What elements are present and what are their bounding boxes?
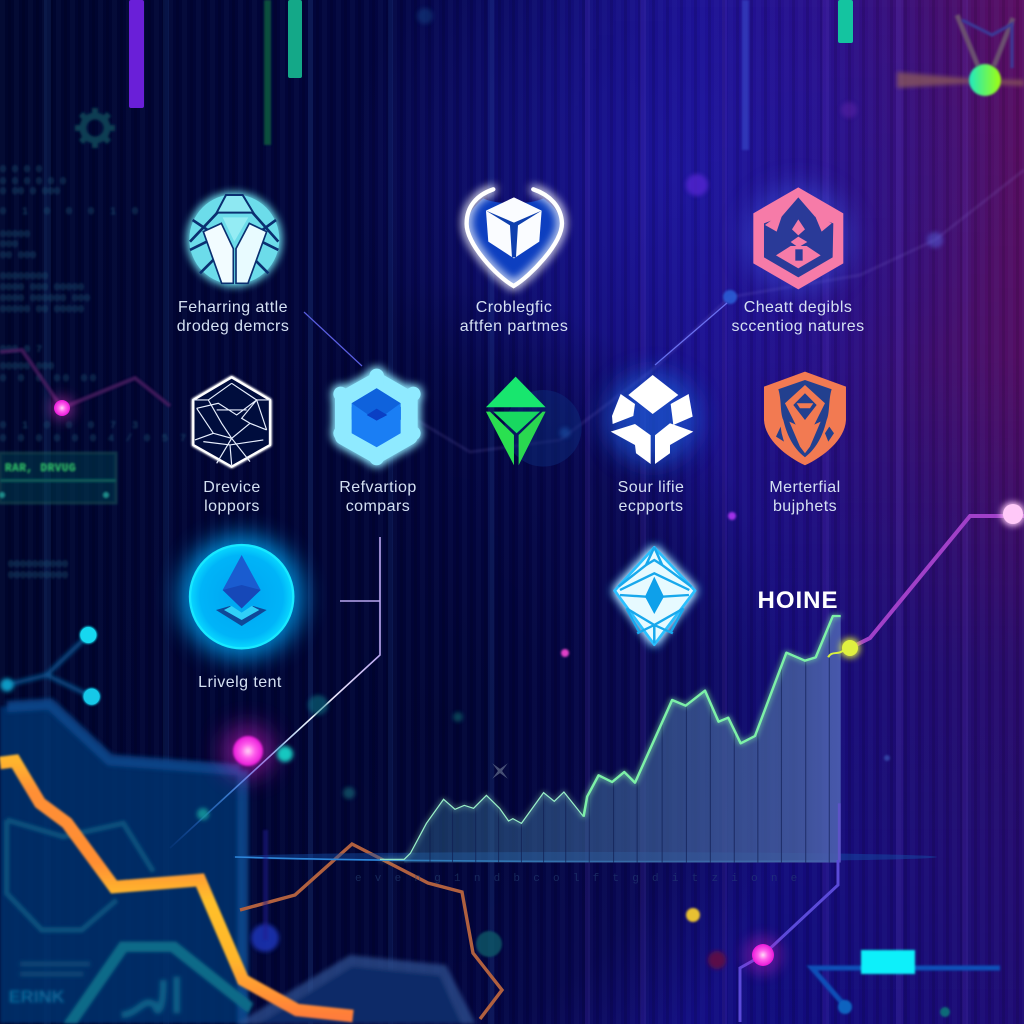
- label: Refvartiop: compars: [346, 498, 410, 515]
- icon 2: shield with cube: [467, 189, 562, 286]
- top-right node network: [897, 15, 1024, 96]
- area chart with glowing line: [380, 616, 844, 863]
- label: Drevice: Drevice: [203, 479, 261, 496]
- icon 1: gem in teal circle: [189, 194, 279, 284]
- label: Cheatt degibls: Cheatt degibls: [744, 299, 852, 316]
- yellow chart marker: [842, 640, 858, 656]
- pink endpoint marker: [1003, 504, 1023, 524]
- faint background trend line: [380, 170, 1024, 452]
- brown trend line: [240, 844, 502, 1019]
- left data text, blurred: 00000: [0, 230, 30, 241]
- label: Merterfial: Merterfial: [769, 479, 841, 496]
- HOINE heading: HOINE: [757, 587, 839, 614]
- icon 9: glowing cyan circle: [180, 535, 303, 658]
- bottom-left glow dots: [197, 695, 328, 952]
- four-point star spark: [484, 755, 516, 787]
- icon 3: pink hexagon: [743, 183, 853, 293]
- label: Feharring attle: drodeg demcrs: [177, 318, 289, 335]
- left data text, blurred: 0 1 0 0 0 1 0: [0, 207, 143, 218]
- label: Sour lifie: Sour lifie: [618, 479, 684, 496]
- blurred blue panel, bottom left: [0, 704, 253, 1023]
- left data text, blurred: 0 1 0 0 0 7 3: [0, 421, 143, 432]
- left data text, blurred: 0000000000: [8, 571, 68, 582]
- green status box: RAR, DRVUG: [5, 463, 76, 475]
- label: Sour lifie: ecpports: [619, 498, 683, 515]
- left data text, blurred: 0000 000000 000: [0, 294, 90, 305]
- icon 5: blue gear: [341, 376, 413, 458]
- left data text, blurred: 0 0 0 0 0 0: [0, 177, 66, 188]
- label: Croblegfic: aftfen partmes: [460, 318, 568, 335]
- left data text, blurred: 0 0 0 0: [0, 165, 42, 176]
- icon 7: white faceted pentagon: [606, 372, 699, 465]
- bottom circuit with magenta node: [476, 860, 838, 1022]
- left data text, blurred: 0000 000 00000: [0, 283, 84, 294]
- left data text, blurred: 00000 00 00000: [0, 305, 84, 316]
- faint axis text: e v e n g 1 n d b c o l f t g d i t z i o n e: [355, 873, 801, 885]
- diagonal connector: [170, 537, 380, 848]
- icon 6: green crystal: [486, 377, 582, 467]
- left data text, blurred: 0 00 0 000: [0, 187, 60, 198]
- left data text, blurred: 000 0 7: [0, 345, 42, 356]
- left data text, blurred: 00000 000: [0, 362, 54, 373]
- left data text, blurred: 0 0 0 00 00: [0, 374, 99, 385]
- baseline ellipse: [233, 852, 937, 862]
- icon 4: wireframe hexagon: [193, 377, 270, 467]
- label: Lrivelg tent: Lrivelg tent: [198, 674, 282, 691]
- left data text, blurred: [0, 165, 225, 582]
- gear icon, faint: [75, 108, 115, 148]
- icon 10: glowing crystal: [615, 547, 695, 645]
- cyan rectangle with connector: [812, 950, 1000, 1017]
- left data text, blurred: 0000000000: [8, 560, 68, 571]
- label: Cheatt degibls: sccentiog natures: [731, 318, 865, 335]
- label: Refvartiop: Refvartiop: [339, 479, 417, 496]
- left data text, blurred: 00 000: [0, 251, 36, 262]
- label: Croblegfic: Croblegfic: [476, 299, 552, 316]
- left node network: [0, 627, 100, 705]
- icon 8: orange shield: [764, 372, 846, 465]
- thin connector lines: [304, 303, 727, 366]
- faint dots: [343, 8, 943, 799]
- label: Drevice: loppors: [204, 498, 260, 515]
- orange trend line, bottom left: [0, 761, 353, 1016]
- top accent bars: [129, 0, 853, 150]
- green status box: [0, 453, 116, 503]
- left data text, blurred: 000: [0, 240, 18, 251]
- left data text, blurred: 00000000: [0, 272, 48, 283]
- purple rising line: [850, 516, 1024, 648]
- left data text, blurred: 0 0 0 0 0 0 4 / 0 5 7 7 6: [0, 433, 225, 445]
- label: Feharring attle: Feharring attle: [178, 299, 288, 316]
- label: Merterfial: bujphets: [773, 498, 837, 515]
- blurred blue panel, bottom left: ERINK: [9, 987, 65, 1007]
- lower blue polygon: [236, 955, 476, 1024]
- left pink trend line: [0, 350, 170, 420]
